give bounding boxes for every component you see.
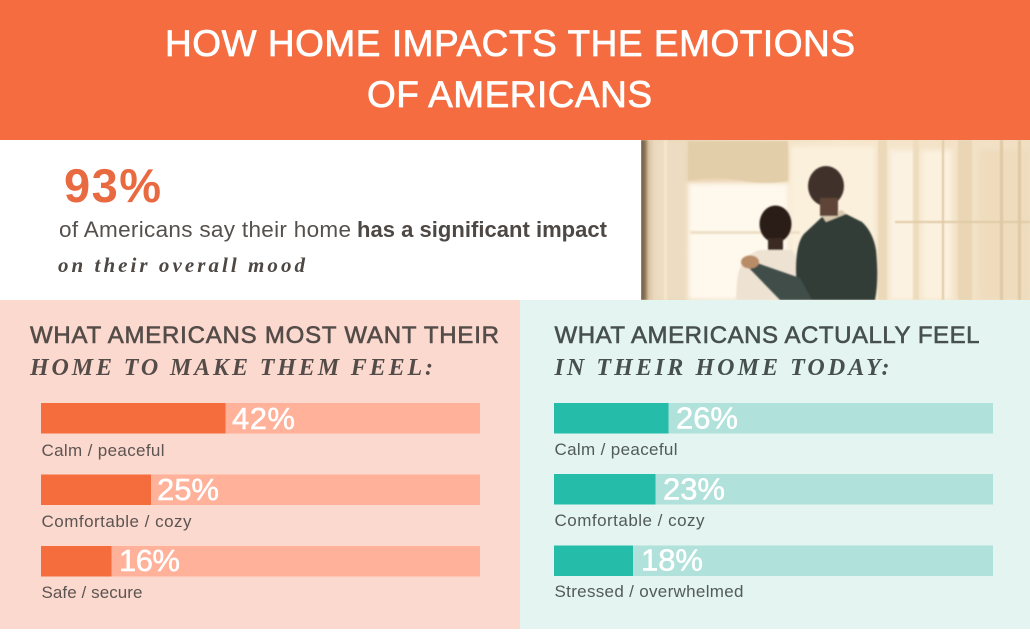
statistic sentence italic part: on their overall mood — [58, 253, 306, 277]
panel heading: WHAT AMERICANS ACTUALLY FEEL — [554, 322, 980, 349]
panel heading: IN THEIR HOME TODAY: — [554, 355, 890, 381]
bar: comfortable 25%: 25% — [157, 472, 219, 507]
title: HOW HOME IMPACTS THE EMOTIONS — [165, 23, 855, 64]
man — [741, 166, 877, 300]
bar: calm 26% — [554, 400, 993, 459]
bar: calm 42%: Calm / peaceful — [42, 441, 164, 460]
panel heading — [29, 322, 499, 381]
bar: calm 42%: 42% — [232, 401, 295, 436]
bar: stressed 18% — [554, 542, 993, 601]
statistic sentence: of Americans say their home — [59, 217, 351, 242]
statistic sentence bold part: has a significant impact — [357, 217, 608, 242]
bar: comfortable 23%: 23% — [663, 472, 725, 506]
bar: stressed 18%: 18% — [641, 542, 703, 578]
panel: what Americans actually feel — [520, 300, 1030, 629]
title: OF AMERICANS — [367, 74, 652, 115]
bar: stressed 18%: Stressed / overwhelmed — [554, 582, 744, 601]
bar: comfortable 23% — [554, 472, 993, 530]
header banner — [0, 0, 1030, 140]
93% figure: 93% — [64, 159, 161, 212]
window and curtain details — [641, 140, 1030, 300]
bar: safe 16% — [41, 543, 480, 602]
title — [165, 23, 855, 115]
panel heading — [554, 322, 980, 381]
bar: comfortable 25% — [41, 472, 480, 531]
bar: calm 26%: 26% — [676, 400, 738, 436]
bar: safe 16%: 16% — [119, 543, 180, 578]
bar: calm 26%: Calm / peaceful — [554, 440, 678, 459]
photo: couple looking out a curtained window — [641, 140, 1030, 300]
bar: comfortable 23%: Comfortable / cozy — [554, 511, 705, 530]
bar: safe 16%: Safe / secure — [42, 583, 142, 602]
panel heading: HOME TO MAKE THEM FEEL: — [29, 355, 433, 381]
key statistic block — [58, 159, 608, 277]
panel: what Americans want — [0, 300, 520, 629]
panel heading: WHAT AMERICANS MOST WANT THEIR — [30, 322, 499, 349]
bar: comfortable 25%: Comfortable / cozy — [42, 512, 192, 531]
bar: calm 42% — [41, 401, 480, 460]
woman — [736, 204, 796, 300]
